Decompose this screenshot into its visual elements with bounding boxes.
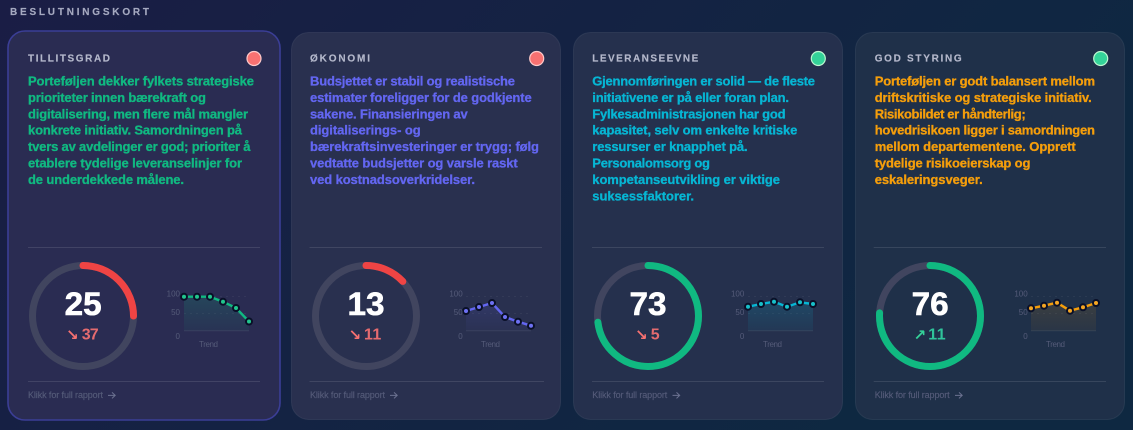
text block: Økonomi summary: [310, 74, 539, 187]
footer link: Klikk for full rapport: [28, 390, 103, 400]
status dot: red: [530, 52, 544, 66]
text block: Tillitsgrad summary: etablere tydelige leveranselinjer for: [28, 156, 242, 170]
text block: God styring summary: tydelige risikoeierskap og: [875, 156, 1030, 170]
text block: God styring summary: mellom departementene. Opprett: [875, 139, 1076, 154]
text block: God styring summary: driftskritiske og strategiske initiativ.: [875, 90, 1092, 105]
line chart: trend: 100: [167, 290, 181, 299]
text block: Tillitsgrad summary: konkrete initiativ. Samordningen på: [28, 123, 243, 138]
text block: Leveranseevne summary: Fylkesadministrasjonen har god: [592, 106, 786, 121]
text block: Tillitsgrad summary: [28, 74, 254, 187]
text block: Økonomi summary: Budsjettet er stabil og realistische: [310, 74, 515, 88]
panel: Tillitsgrad: [8, 31, 280, 420]
text block: Leveranseevne summary: Gjennomføringen er solid — de fleste: [592, 74, 815, 88]
gauge: score 13: ↘: [348, 326, 361, 344]
text block: Leveranseevne summary: [592, 74, 815, 203]
line chart: trend: 50: [1019, 308, 1028, 317]
line chart: trend: 0: [458, 332, 463, 341]
gauge: score 73: 5: [651, 326, 660, 343]
line chart: trend: Trend: [763, 340, 782, 349]
line chart: trend: Trend: [1046, 340, 1065, 349]
gauge: score 73: ↘: [635, 326, 648, 344]
panel: Økonomi: [292, 32, 560, 420]
gauge: score 25: 25: [65, 286, 102, 322]
heading: God styring: GOD STYRING: [875, 54, 962, 65]
line chart: trend: [1014, 290, 1099, 349]
line chart: trend: [167, 290, 252, 349]
text block: God styring summary: hovedrisikoen ligger i samordningen: [875, 123, 1095, 138]
line chart: trend: 0: [1023, 332, 1028, 341]
text block: Leveranseevne summary: Personalomsorg og: [592, 156, 710, 170]
text block: Leveranseevne summary: kompetanseutvikling er viktige: [592, 172, 780, 187]
line chart: trend: 50: [171, 308, 181, 317]
text block: Økonomi summary: sakene. Finansieringen av: [310, 106, 468, 121]
text block: God styring summary: Porteføljen er godt balansert mellom: [875, 74, 1095, 88]
line chart: trend: [731, 290, 816, 349]
gauge: score 25: ↘: [66, 326, 79, 344]
line chart: trend: 50: [735, 308, 745, 317]
text block: Leveranseevne summary: initiativene er på eller foran plan.: [592, 90, 789, 105]
gauge: score 73: 73: [630, 286, 666, 322]
text block: Økonomi summary: digitaliserings- og: [310, 123, 421, 138]
gauge: score 13: 11: [364, 326, 381, 343]
text block: Leveranseevne summary: suksessfaktorer.: [592, 188, 694, 203]
line chart: trend: 100: [731, 290, 745, 299]
text block: Tillitsgrad summary: tvers av avdelinger er god; prioriter å: [28, 139, 251, 154]
text block: Økonomi summary: estimater foreligger for de godkjente: [310, 90, 532, 105]
line chart: trend: 100: [449, 290, 463, 299]
section heading: BESLUTNINGSKORT: [10, 7, 149, 18]
line chart: trend: 0: [176, 332, 181, 341]
heading: Økonomi: ØKONOMI: [310, 54, 370, 65]
text block: Tillitsgrad summary: de underdekkede målene.: [28, 172, 184, 187]
heading: Leveranseevne: LEVERANSEEVNE: [592, 54, 699, 65]
footer link: Klikk for full rapport: [310, 390, 385, 400]
gauge: score 25: [32, 266, 134, 366]
text block: Leveranseevne summary: ressurser er knapphet på.: [592, 139, 748, 154]
heading: Tillitsgrad: TILLITSGRAD: [28, 54, 110, 65]
text block: Tillitsgrad summary: Porteføljen dekker fylkets strategiske: [28, 74, 254, 88]
gauge: score 25: 37: [82, 326, 99, 343]
line chart: trend: [449, 290, 534, 349]
line chart: trend: Trend: [481, 340, 500, 349]
text block: God styring summary: eskaleringsveger.: [875, 172, 983, 187]
footer link: Klikk for full rapport: [875, 390, 950, 400]
gauge: score 76: 11: [928, 326, 946, 343]
panel: God styring: [856, 32, 1124, 420]
gauge: score 13: 13: [348, 286, 384, 322]
text block: Tillitsgrad summary: digitalisering, men flere mål mangler: [28, 106, 248, 121]
text block: Økonomi summary: bærekraftsinvesteringer er trygg; følg: [310, 139, 539, 154]
status dot: red: [247, 52, 261, 66]
line chart: trend: Trend: [199, 340, 218, 349]
gauge: score 76: ↗: [914, 326, 926, 344]
panel: Leveranseevne: [574, 32, 842, 420]
gauge: score 13: [316, 266, 416, 366]
gauge: score 76: [880, 266, 980, 366]
text block: Leveranseevne summary: kapasitet, selv om enkelte kritiske: [592, 123, 797, 138]
text block: Økonomi summary: vedtatte budsjetter og varsle raskt: [310, 156, 518, 170]
gauge: score 73: [598, 266, 698, 366]
line chart: trend: 50: [454, 308, 463, 317]
footer link: Klikk for full rapport: [592, 390, 668, 400]
text block: God styring summary: Risikobildet er håndterlig;: [875, 106, 1026, 121]
gauge: score 76: 76: [912, 286, 949, 322]
line chart: trend: 0: [740, 332, 745, 341]
status dot: green: [1094, 52, 1108, 66]
line chart: trend: 100: [1014, 290, 1028, 299]
text block: Tillitsgrad summary: prioriteter innen bærekraft og: [28, 90, 206, 105]
text block: God styring summary: [875, 74, 1095, 187]
text block: Økonomi summary: ved kostnadsoverkridelser.: [310, 172, 475, 187]
status dot: green: [811, 52, 825, 66]
